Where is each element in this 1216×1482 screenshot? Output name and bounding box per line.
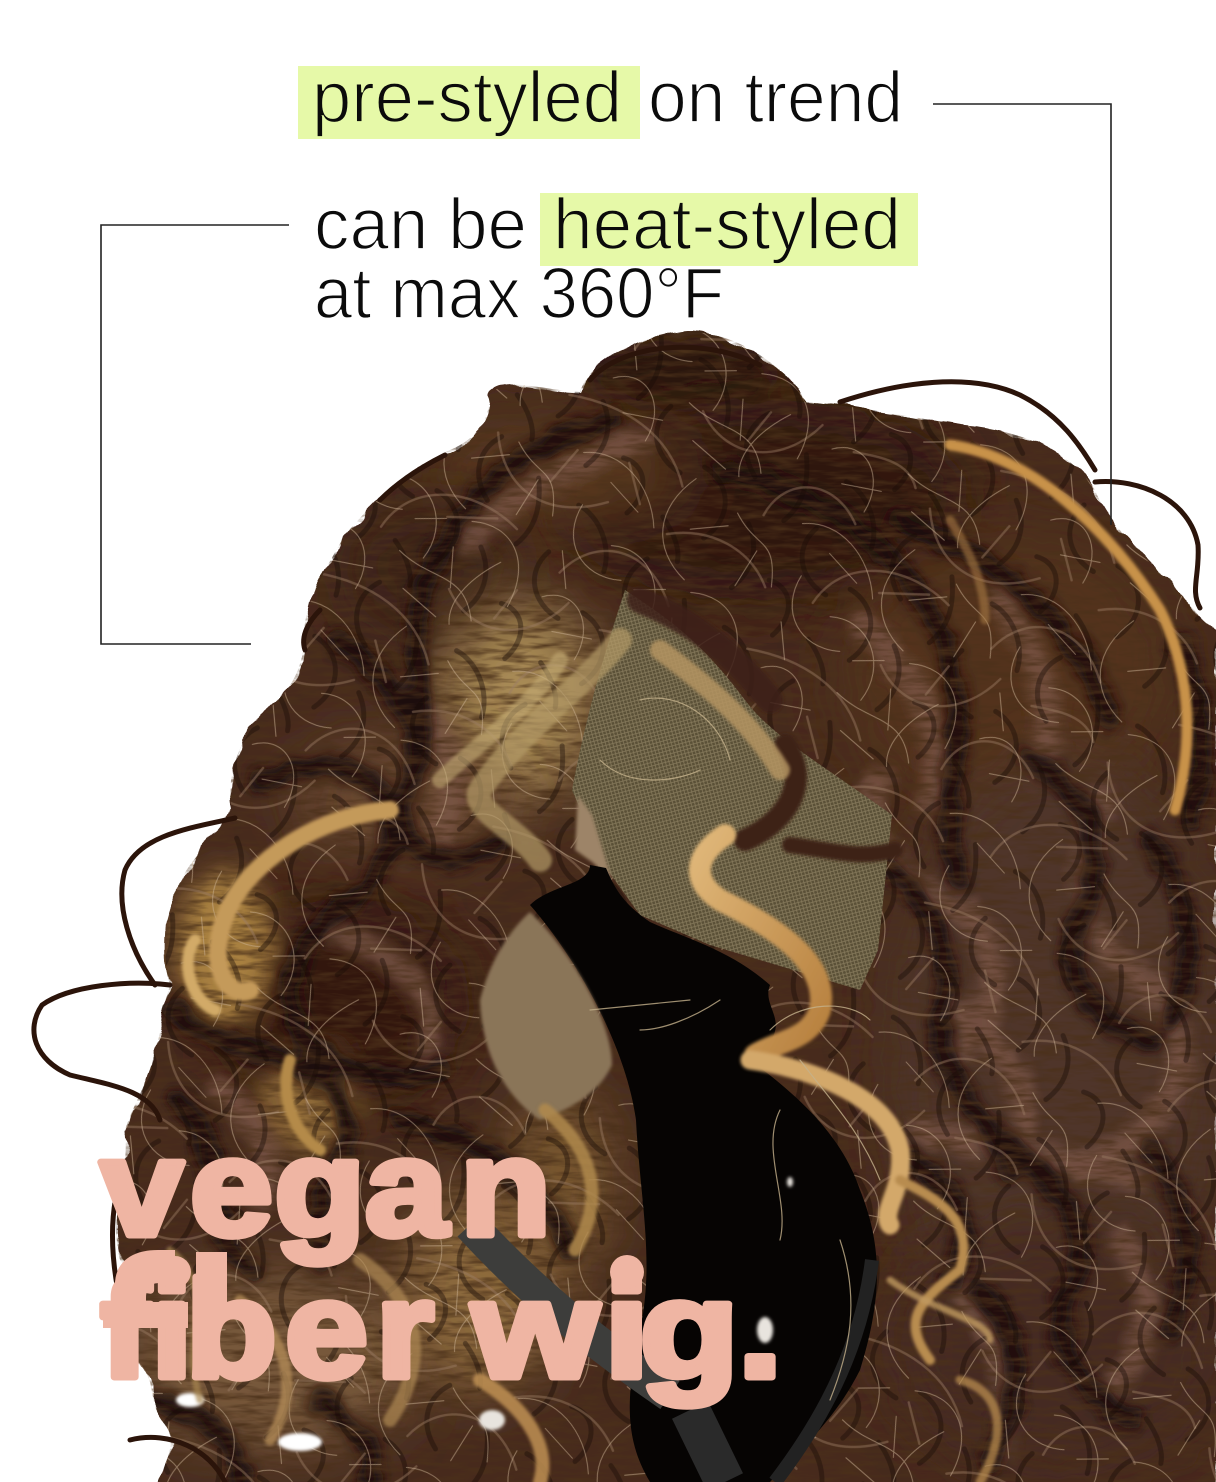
leader line from heat styled to wig [101,225,289,644]
tall ascender shapes [103,1250,644,1328]
wig hair mass with tonal zones [116,330,1216,1482]
white gaps and reflections [176,1177,793,1451]
dark wig stand opening [530,865,877,1482]
flyaway curls around the outline [34,347,1200,1482]
highlight block [298,66,640,139]
fine strand textures [116,332,1216,1482]
callout: heat styled [314,185,918,334]
label pre-styled: pre-styled [312,58,622,138]
label can be: can be [314,185,527,265]
left inner lace [480,912,612,1120]
title [100,1111,783,1407]
lace front panel [572,590,895,990]
photo: curly brown wig on a black stand [31,330,1216,1482]
title line one: vegan [100,1111,551,1265]
stand straps [470,1225,872,1482]
label on trend: on trend [648,58,903,138]
dark brown curl shadows [150,420,1201,1482]
highlight block [540,193,918,266]
title line two word one: fiber [100,1253,434,1407]
title line two word two: wig. [471,1252,783,1406]
stray strands over lace and stand [590,698,880,1400]
skin tone inner strip [575,795,612,880]
label at max 360F: at max 360°F [314,254,724,334]
label heat-styled: heat-styled [553,185,901,265]
leader line from on trend to wig [933,104,1111,525]
lighter brown curl ribbons [220,440,1181,1450]
brown curls crossing the lace [640,600,895,854]
golden highlight curls [170,445,1187,1482]
callout: pre-styled on trend [298,58,903,139]
